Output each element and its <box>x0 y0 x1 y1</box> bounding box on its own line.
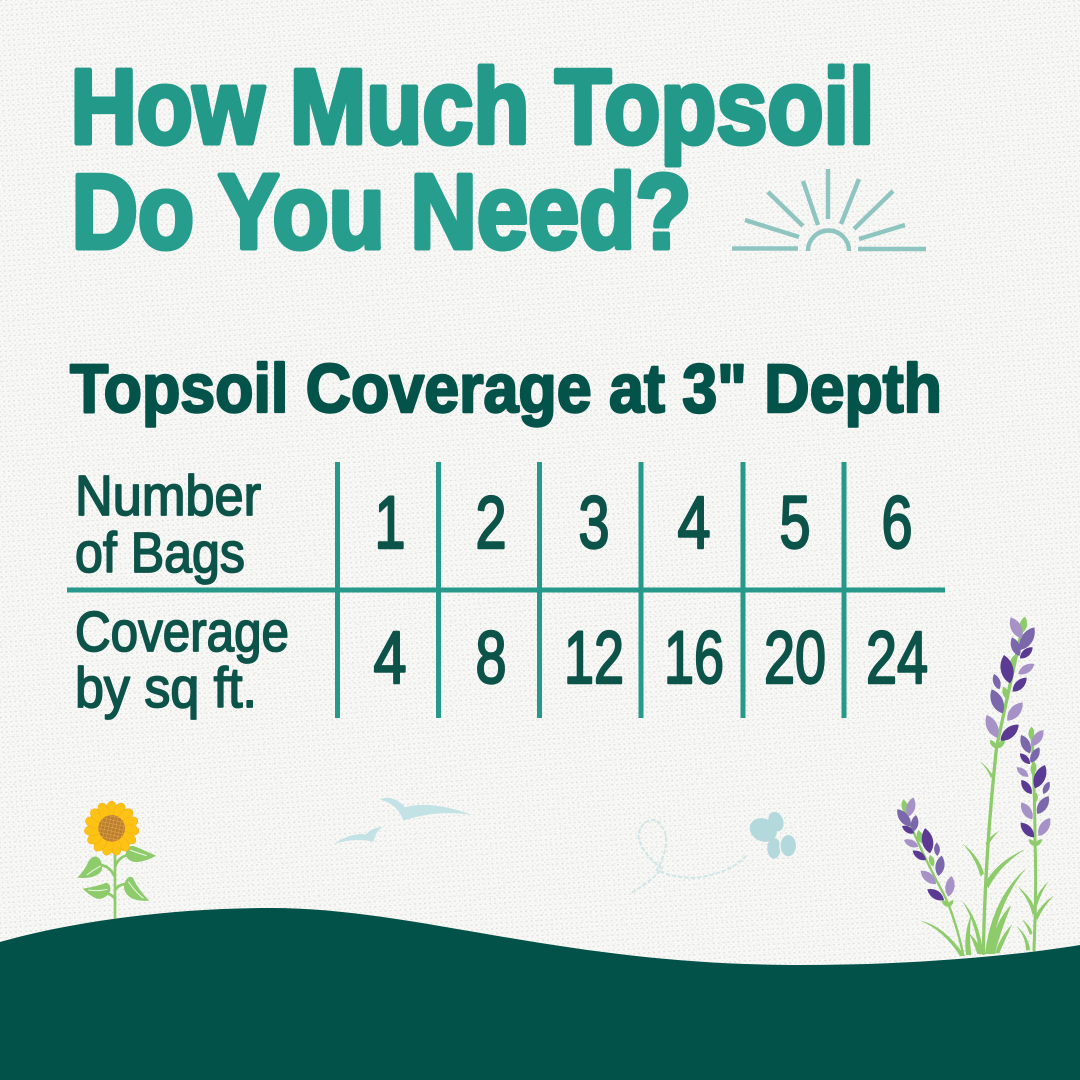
row label: number of bags: of Bags <box>75 521 245 585</box>
row values: number of bags <box>374 481 912 564</box>
row values: number of bags: 4 <box>678 481 710 564</box>
row values: coverage: 8 <box>476 616 506 699</box>
lavender grass blades <box>920 761 1054 956</box>
icon: birds <box>333 798 473 844</box>
row values: number of bags: 5 <box>780 481 810 564</box>
title line 1: How Much Topsoil <box>70 48 874 166</box>
table grid lines <box>67 462 945 718</box>
lavender flower leaves: green sepals <box>900 616 1043 908</box>
title <box>70 48 874 271</box>
icon: sun <box>732 169 926 251</box>
sunflower leaves <box>77 846 156 901</box>
lavender flower leaves: dark <box>900 645 1050 904</box>
lavender flower leaves: light <box>903 615 1054 897</box>
lavender stems <box>903 620 1036 955</box>
icon: sunflower <box>77 801 156 918</box>
ground: dark green hill <box>0 908 1080 1080</box>
coverage table <box>67 462 945 720</box>
row values: number of bags: 2 <box>476 481 506 564</box>
row label: coverage by sq ft: Coverage <box>75 600 289 664</box>
icon: lavender plants <box>894 615 1054 956</box>
row values: coverage: 12 <box>564 616 624 699</box>
row values: number of bags: 6 <box>882 481 912 564</box>
row label: number of bags <box>75 464 261 585</box>
sunflower stem <box>101 847 128 918</box>
row label: coverage by sq ft <box>75 600 289 720</box>
lavender flower leaves: medium <box>894 624 1053 877</box>
row values: number of bags: 1 <box>374 481 406 564</box>
row values: number of bags: 3 <box>578 481 610 564</box>
title line 2: Do You Need? <box>72 153 692 271</box>
sunflower leaf veins <box>87 850 147 898</box>
row values: coverage: 16 <box>664 616 724 699</box>
row values: coverage: 24 <box>866 616 928 699</box>
row values: coverage: 20 <box>764 616 826 699</box>
sunflower centre <box>98 815 125 842</box>
row label: number of bags: Number <box>75 464 261 528</box>
sunflower petals <box>84 801 139 856</box>
row label: coverage by sq ft: by sq ft. <box>75 656 257 720</box>
row values: coverage <box>374 616 928 699</box>
row values: coverage: 4 <box>374 616 406 699</box>
icon: bee with dashed flight path <box>632 810 797 893</box>
subheading: Topsoil Coverage at 3" Depth <box>70 350 942 427</box>
